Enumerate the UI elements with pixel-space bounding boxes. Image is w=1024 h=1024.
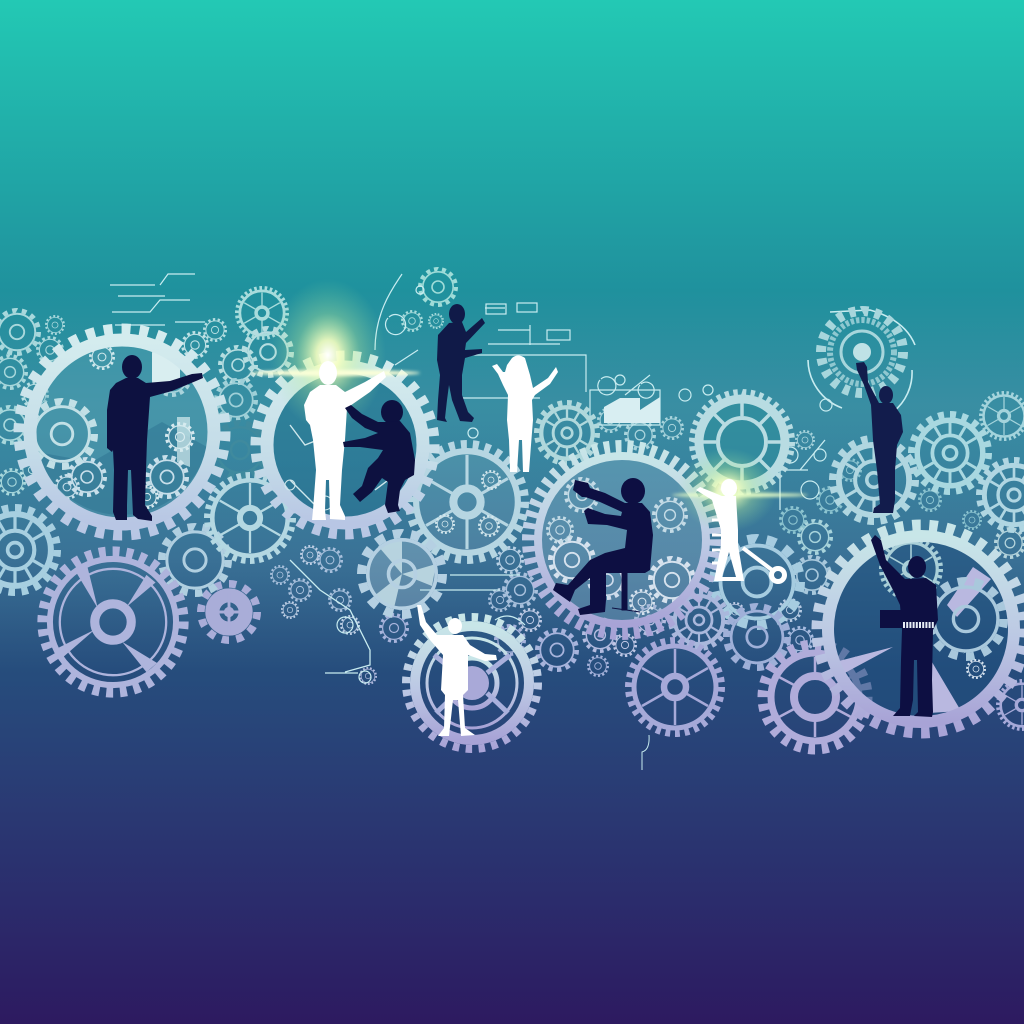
gear: solid small <box>201 584 257 640</box>
figure: man with raised arm, right <box>856 362 903 513</box>
figure: white man reaching <box>304 361 386 520</box>
light glow: center right <box>672 448 808 532</box>
figure: man at top center <box>437 304 485 422</box>
gear: large second with interior <box>256 356 434 534</box>
gear: far right small <box>981 393 1024 439</box>
gear: small center <box>362 534 442 614</box>
gear: near chart <box>537 403 597 463</box>
gear: right spoked <box>911 414 989 492</box>
figure: man with tool belt, far right <box>871 535 938 717</box>
light band behind the machinery <box>0 290 1024 670</box>
gear: floating top right <box>821 311 903 393</box>
gear: far right mid <box>979 460 1024 530</box>
gear: center <box>409 444 525 560</box>
gear: spoked bottom <box>628 640 722 734</box>
gear: wedge large left <box>42 551 184 693</box>
figure: white man with ladder <box>696 479 784 582</box>
gear: with hub <box>162 527 228 593</box>
gear: small left lower <box>0 508 57 592</box>
gear: center-left <box>207 475 293 561</box>
gear: lower middle ring <box>714 539 800 625</box>
gear: large right with interior <box>817 525 1024 733</box>
gear: far right bottom <box>998 681 1024 729</box>
gear: bottom center with white figure <box>406 617 538 749</box>
figure: seated man with tool <box>553 478 653 615</box>
circuit lines and interface panels <box>110 274 915 770</box>
bar chart <box>604 397 660 423</box>
gear: round wheel upper center <box>692 392 792 492</box>
figure: white man, bottom center <box>417 605 497 736</box>
gear: bottom middle small <box>670 591 728 649</box>
figure: white woman <box>492 356 558 472</box>
small background gears and outlines <box>0 269 1024 684</box>
gear: ring lower <box>726 606 788 668</box>
gear: large left with interior <box>19 329 225 535</box>
figure: crouching man <box>343 400 415 513</box>
gear: bottom right heavy <box>763 645 867 749</box>
figure: man pointing, left <box>107 355 203 521</box>
gear: right cluster wheel <box>833 439 915 521</box>
gear: large center with interior <box>529 447 715 633</box>
light glow: upper left <box>250 279 420 431</box>
